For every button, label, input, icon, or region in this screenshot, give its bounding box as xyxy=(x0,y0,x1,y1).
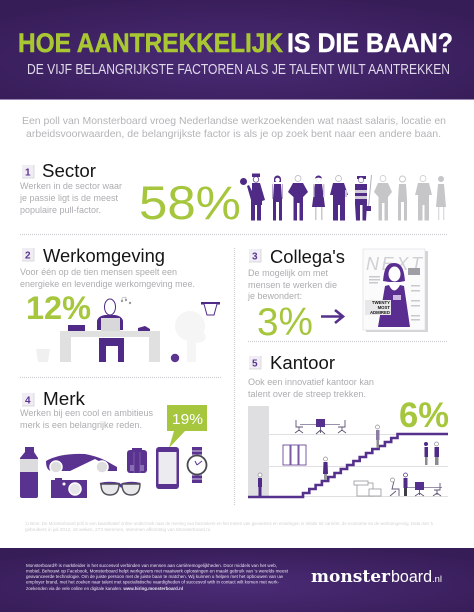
logo: .nl xyxy=(432,574,442,584)
icon: backpack xyxy=(127,448,147,473)
title: HOE AANTREKKELIJK xyxy=(18,28,283,58)
footnote: 1) Bron: De Monsterboard poll is een kwantitatief online onderzoek naar de mening van bezoekers en het meten van gevoelens en ervaringen in relatie tot carrière, de economie en de werkomgeving. Data met 's xyxy=(25,521,433,526)
top meeting table xyxy=(295,419,346,434)
footer text: zoekenden via de vele online en digitale kanalen. www.hiring.monsterboard.nl xyxy=(26,586,183,592)
58 percent: 58% xyxy=(139,176,241,229)
icon: camera xyxy=(51,478,87,498)
description xyxy=(19,181,122,215)
panel: sector xyxy=(19,161,446,229)
panel: werkomgeving xyxy=(20,246,220,362)
logo xyxy=(311,567,442,587)
person: builder xyxy=(355,175,372,220)
title: IS DIE BAAN? xyxy=(287,28,453,58)
number badge 5 xyxy=(249,356,261,370)
description xyxy=(247,268,337,301)
illustration: desk scene xyxy=(36,297,220,362)
person: woman vest xyxy=(272,176,283,220)
person: grey man xyxy=(374,176,392,220)
footer text xyxy=(26,562,289,592)
number badge 1 xyxy=(22,165,34,178)
icon: wristwatch xyxy=(188,447,206,483)
footnote xyxy=(25,521,433,532)
person: nurse xyxy=(330,176,348,220)
description: mensen te werken die xyxy=(248,280,337,290)
icon: car xyxy=(46,454,117,473)
panel: kantoor xyxy=(248,353,449,497)
description: Werken bij een cool en ambitieus xyxy=(20,408,154,418)
description: Werken in de sector waar xyxy=(20,181,122,191)
description: je passie ligt is de meest xyxy=(19,193,119,203)
number badge 3 xyxy=(249,249,261,262)
number badge 3: 3 xyxy=(252,252,258,262)
description xyxy=(20,408,154,430)
12 percent: 12% xyxy=(26,290,91,326)
music notes xyxy=(121,297,131,304)
footer text: Monsterboard® is marktleider in het succesvol verbinden van mensen aan carrièremogelijkheden. Door middels van het web, xyxy=(26,562,277,569)
dotted dividers xyxy=(20,234,448,506)
number badge 1: 1 xyxy=(25,168,31,178)
description: Ook een innovatief kantoor kan xyxy=(248,377,374,387)
stair person top xyxy=(376,425,380,448)
magazine cover xyxy=(363,249,428,332)
lockers xyxy=(283,445,306,465)
footer band xyxy=(0,548,474,612)
number badge 2: 2 xyxy=(25,250,31,262)
person: grey dress xyxy=(436,176,446,220)
stair person middle xyxy=(323,457,328,480)
number badge 5: 5 xyxy=(252,358,258,370)
footnote: gebruikers in juli 2012, 16 weken, 273 stemmen, stemmen afkomstig van Monsterboard.nl. xyxy=(25,527,211,532)
description: populaire pull-factor. xyxy=(20,205,101,215)
description: je bewondert: xyxy=(247,291,302,301)
book and shoe xyxy=(68,325,150,331)
footer text: employer brand, met het zoeken naar talent met specialistische vaardigheden of succesvol with in contact wilt komen met werk- xyxy=(26,580,279,586)
description: talent over de streep trekken. xyxy=(248,389,366,399)
panel: merk xyxy=(20,389,207,498)
description: energieke en levendige werkomgeving mee. xyxy=(20,279,195,289)
stair person lower xyxy=(258,473,262,496)
footer text: geavanceerde technologie. Om de juiste persoon met de juiste baan te matchen. Wij kunnen u helpen met het opbouwen van uw xyxy=(26,574,283,580)
building pillar and floors xyxy=(248,406,448,497)
arrow xyxy=(321,310,343,323)
panel: collega's xyxy=(247,247,428,344)
icon: glasses xyxy=(100,483,140,495)
magazine cover: NEXT xyxy=(366,254,424,274)
two standing people xyxy=(424,442,439,465)
person: man suit xyxy=(288,176,308,220)
copier xyxy=(354,481,381,496)
magazine cover: MOST xyxy=(378,305,390,310)
intro text: arbeidsvoorwaarden, de belangrijkste factor is als je op zoek bent naar een andere baan. xyxy=(26,128,441,140)
description: Voor één op de tien mensen speelt een xyxy=(20,267,177,277)
bottom meeting group xyxy=(390,473,442,496)
desk xyxy=(60,331,160,362)
title xyxy=(18,28,453,58)
person: grey woman xyxy=(398,176,407,220)
callout 19 percent: 19% xyxy=(172,411,203,428)
intro text xyxy=(22,115,446,140)
description: De mogelijk om met xyxy=(248,268,329,278)
heading: Werkomgeving xyxy=(43,246,165,266)
3 percent: 3% xyxy=(257,301,313,344)
heading: Kantoor xyxy=(270,353,335,373)
plant xyxy=(175,311,206,362)
person at laptop xyxy=(97,299,124,362)
footer text: mobiel, Behouwt op Facebook, Monsterboard helpt werkgevers met maatwerk oplossingen en maakt gebruik van 's werelds meest xyxy=(26,568,289,574)
ball xyxy=(171,354,179,362)
description xyxy=(248,377,374,399)
person: chef xyxy=(240,174,265,220)
icon: smartphone xyxy=(156,447,179,489)
header banner xyxy=(0,0,474,100)
staircase xyxy=(248,434,448,497)
people pictogram row xyxy=(240,174,446,220)
magazine cover: TWENTY xyxy=(372,300,390,305)
number badge 4: 4 xyxy=(25,396,31,406)
icon: bottle xyxy=(20,447,38,498)
intro text: Een poll van Monsterboard vroeg Nederlandse werkzoekenden wat naast salaris, locatie en xyxy=(22,115,446,127)
number badge 4 xyxy=(22,393,34,406)
logo: board xyxy=(391,567,432,586)
bin xyxy=(36,349,50,362)
illustration: office building with stairs xyxy=(248,406,448,497)
description xyxy=(20,267,195,289)
callout 19 percent xyxy=(167,405,207,448)
person: woman dress xyxy=(312,176,325,220)
magazine cover: ADMIRED xyxy=(370,310,390,315)
heading: Merk xyxy=(43,389,86,409)
number badge 2 xyxy=(22,248,34,262)
6 percent: 6% xyxy=(399,396,449,435)
heading: Collega's xyxy=(270,247,345,267)
description: merk is een belangrijke reden. xyxy=(20,420,142,430)
person: grey nurse xyxy=(415,176,432,220)
heading: Sector xyxy=(42,161,96,181)
lamp xyxy=(201,302,220,315)
logo: monster xyxy=(311,567,391,587)
